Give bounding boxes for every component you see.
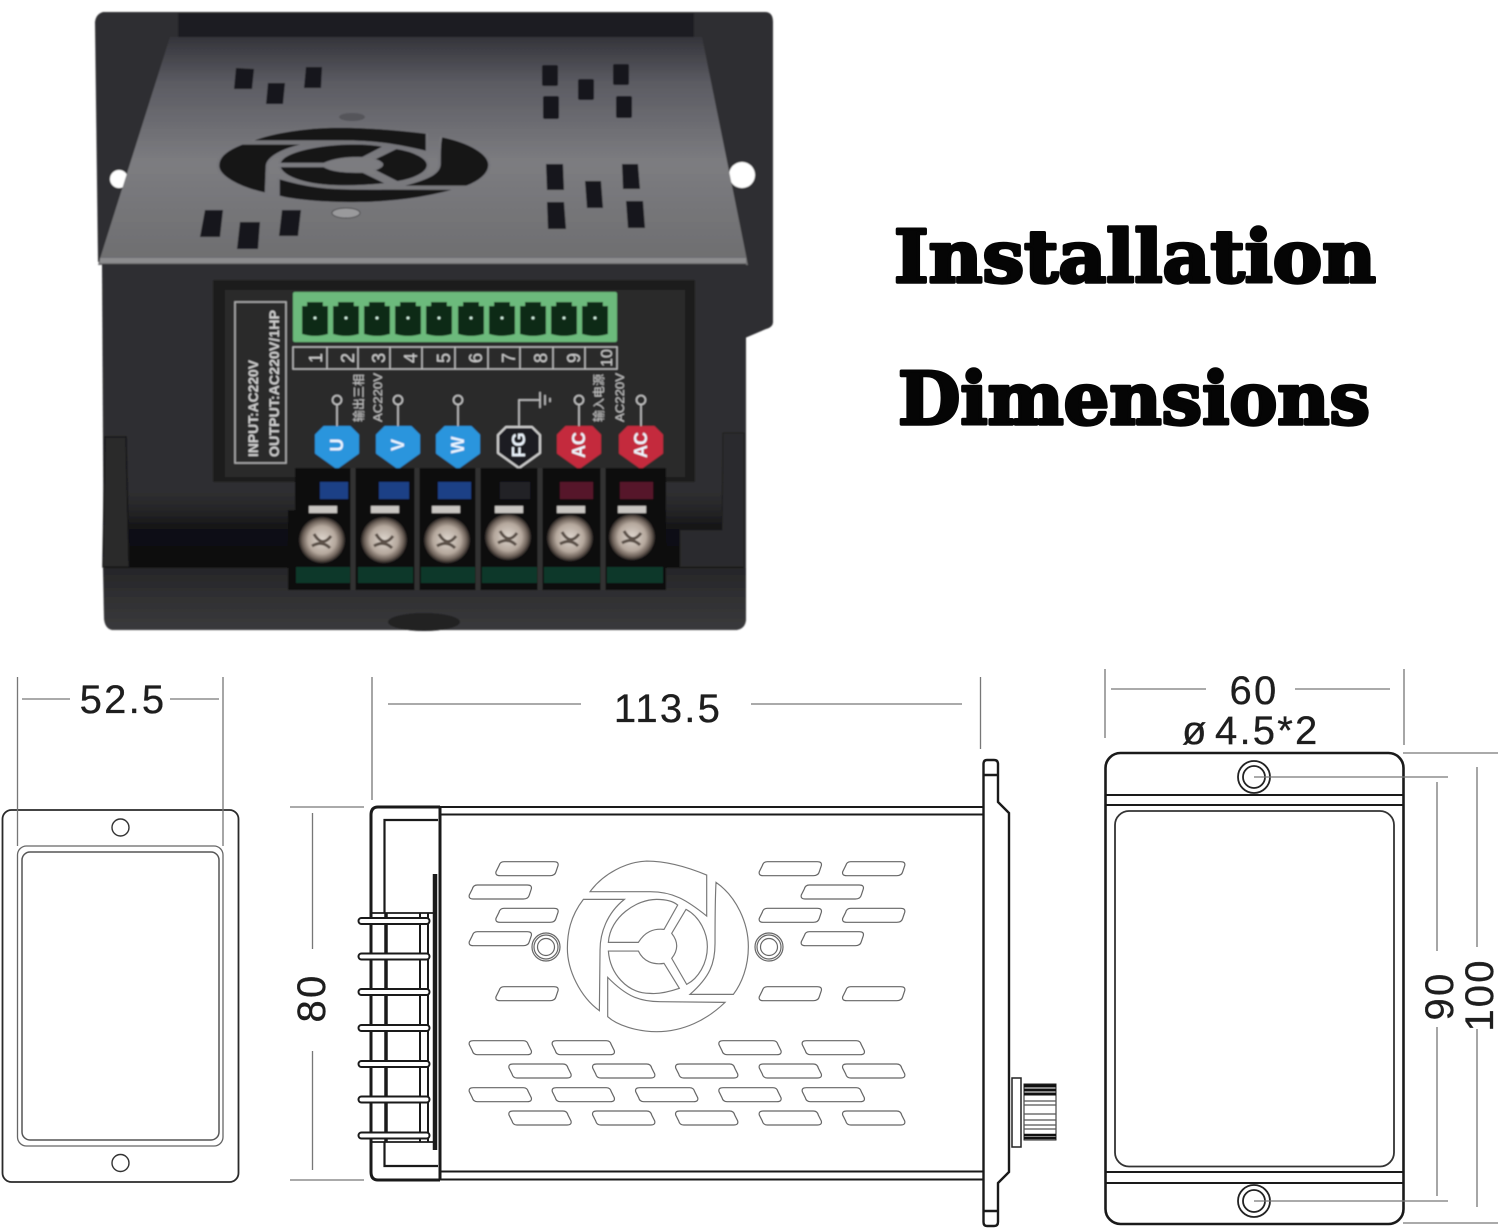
dimension: width 60 and hole diameter: ø [1182, 709, 1209, 753]
mounting hole: left [110, 170, 128, 188]
outer plate [2, 810, 238, 1182]
dimension: hole spacing 90 [1254, 777, 1462, 1201]
output and input voltage notes [351, 373, 627, 422]
fixing screw: left [532, 933, 560, 961]
mounting hole: right [729, 162, 755, 188]
output and input voltage notes: AC220V [371, 373, 385, 422]
lower shadow [106, 482, 744, 568]
bottom oval [388, 613, 460, 631]
terminal number strip: 6 [466, 353, 486, 363]
rating label: OUTPUT:AC220V/1HP [266, 310, 282, 457]
dimension: height 100 [1403, 753, 1500, 1223]
dimension: length 113.5: 113.5 [614, 687, 722, 731]
terminal tags U V W FG AC AC: AC [569, 432, 589, 458]
mounting plate [95, 12, 773, 338]
terminal number strip: 1 [306, 353, 326, 363]
mounting hole: top [1238, 761, 1270, 793]
inner housing outline [18, 846, 223, 1146]
title: Installation Dimensions [894, 214, 1376, 441]
green board strips [296, 567, 663, 583]
terminal number strip: 2 [338, 353, 358, 363]
dimension: width 60 and hole diameter [1105, 669, 1404, 753]
rear view of controller [1106, 753, 1404, 1224]
screw terminal block [288, 468, 666, 590]
terminal rungs [358, 918, 430, 1138]
output and input voltage notes: AC220V [613, 373, 627, 422]
mounting flange [984, 760, 1009, 1226]
terminal number strip: 4 [401, 353, 421, 363]
vent slots [200, 64, 645, 249]
inner panel [22, 852, 219, 1140]
side view of controller [358, 760, 1056, 1226]
mounting hole: bottom [1238, 1185, 1270, 1217]
terminal tags U V W FG AC AC: W [448, 436, 468, 454]
lower lip [103, 568, 746, 630]
title: Installation Dimensions: Dimensions [898, 356, 1370, 441]
dimension: width 52.5 [18, 677, 223, 846]
terminal windows [320, 482, 653, 499]
top cover [98, 37, 748, 265]
flange lines [1106, 795, 1403, 1183]
output and input voltage notes: 输出三相 [351, 374, 366, 422]
screw: top [339, 113, 365, 121]
rating label [235, 302, 286, 463]
terminal number strip [293, 347, 617, 369]
terminal number strip: 3 [369, 353, 389, 363]
side tab: left [103, 437, 129, 567]
fixing screw: right [755, 933, 783, 961]
terminal number strip: 7 [499, 353, 519, 363]
terminal tags U V W FG AC AC: FG [509, 432, 529, 458]
dimension: width 52.5: 52.5 [80, 678, 166, 722]
terminal number strip: 9 [564, 353, 584, 363]
fan grille [218, 127, 490, 202]
fan grille outline [567, 861, 748, 1032]
green terminal connector [293, 292, 617, 342]
dimension: hole spacing 90: 90 [1418, 972, 1462, 1020]
dimension: height 80: 80 [290, 974, 334, 1022]
side tab: right [680, 433, 744, 567]
title: Installation Dimensions: Installation [894, 214, 1376, 299]
label panel [213, 280, 695, 482]
terminal tags U V W FG AC AC: AC [631, 432, 651, 458]
mounting hole: bottom [112, 1154, 129, 1172]
top edge highlight [100, 258, 746, 263]
rear shadow band [178, 13, 694, 45]
terminal tags U V W FG AC AC: U [327, 438, 347, 452]
outer body [1106, 753, 1404, 1224]
terminal tags U V W FG AC AC: V [388, 439, 408, 451]
end view with mounting plate [2, 810, 238, 1182]
pin leads [332, 392, 646, 427]
screw: bottom [332, 208, 360, 218]
output and input voltage notes: 输入电源 [591, 374, 606, 422]
dimension: length 113.5 [372, 677, 980, 800]
front face [102, 264, 746, 630]
terminal number strip: 10 [599, 349, 616, 367]
control knob [1012, 1078, 1056, 1147]
terminal number strip: 5 [434, 353, 454, 363]
inner panel [1115, 811, 1394, 1166]
ventilation slots [469, 862, 905, 1125]
terminal number strip: 8 [531, 353, 551, 363]
body rails [440, 807, 983, 1180]
terminal tags U V W FG AC AC [316, 427, 662, 468]
rating label: INPUT:AC220V [245, 359, 261, 457]
dimension: height 80 [290, 807, 364, 1180]
product photo: motor speed controller [95, 12, 773, 631]
left terminal housing [371, 807, 440, 1180]
mounting hole: top [112, 819, 129, 836]
terminal screws [299, 514, 655, 563]
dimension: width 60 and hole diameter: 60 [1230, 669, 1278, 713]
terminal clips [309, 506, 646, 513]
dimension: width 60 and hole diameter: 4.5*2 [1215, 709, 1319, 753]
